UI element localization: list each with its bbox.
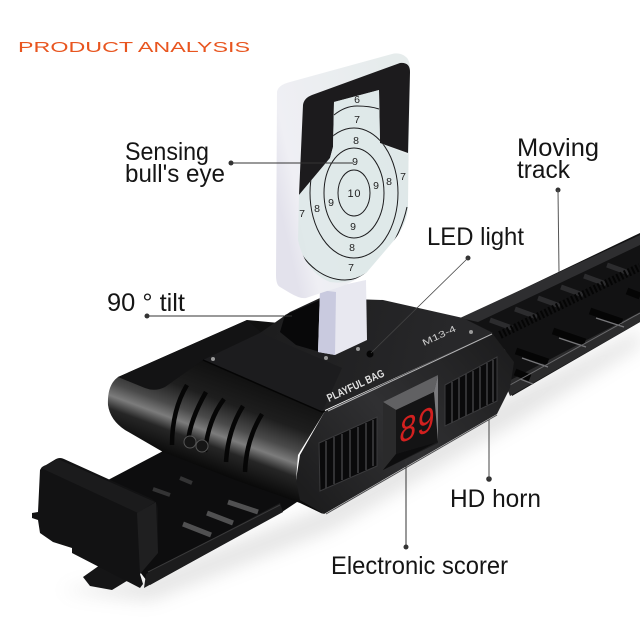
label: electronic scorer	[331, 460, 508, 580]
target numbers: 9	[328, 197, 334, 209]
label: electronic scorer: Electronic scorer	[331, 552, 508, 580]
score digits: 89	[397, 399, 437, 456]
label: sensing bull's eye: bull's eye	[125, 160, 225, 188]
ground shadow	[60, 330, 640, 600]
label: sensing bull's eye	[125, 138, 353, 188]
LED hole	[366, 350, 374, 358]
label: moving track: track	[517, 156, 570, 184]
target numbers: 9	[373, 180, 379, 192]
electronic display	[383, 375, 438, 470]
lower row slots	[515, 291, 640, 378]
rear dip	[118, 320, 262, 390]
rail slots	[183, 502, 258, 535]
moving track	[458, 233, 640, 396]
target numbers: 8	[353, 135, 359, 147]
label: 90 degree tilt: 90 ° tilt	[107, 289, 185, 317]
outer rail band	[460, 235, 640, 322]
label: moving track	[517, 134, 599, 272]
scorer body	[108, 298, 514, 514]
target numbers: 9	[352, 156, 358, 168]
target numbers: 7	[299, 208, 305, 220]
target numbers: 9	[350, 221, 356, 233]
target stem	[318, 280, 367, 355]
label: moving track: Moving	[517, 134, 599, 162]
cylinder body	[108, 320, 325, 514]
ribs	[172, 385, 262, 472]
target numbers: 7	[348, 262, 354, 274]
right speaker grille	[445, 357, 497, 426]
target plate	[276, 53, 410, 298]
screws	[211, 330, 473, 361]
target numbers: 6	[354, 94, 360, 106]
top plate	[203, 298, 493, 412]
front face	[296, 333, 514, 514]
label: LED light: LED light	[427, 223, 524, 251]
target numbers: 8	[349, 242, 355, 254]
target numbers: 7	[354, 114, 360, 126]
front rail	[32, 450, 300, 590]
end plate	[32, 458, 158, 588]
target rings	[295, 106, 407, 280]
target numbers: 7	[400, 171, 406, 183]
label: sensing bull's eye: Sensing	[125, 138, 209, 166]
left speaker grille	[319, 417, 377, 491]
hex screws	[184, 436, 208, 452]
target numbers: 8	[314, 203, 320, 215]
brand text: PLAYFUL BAG	[325, 368, 386, 405]
label: 90 degree tilt	[107, 289, 292, 318]
upper row slots	[490, 265, 629, 328]
model text: M13-4	[421, 324, 457, 348]
label: HD horn	[450, 420, 541, 513]
label: LED light	[371, 223, 524, 353]
label: HD horn: HD horn	[450, 485, 541, 513]
title: PRODUCT ANALYSIS	[18, 39, 250, 56]
target numbers	[299, 94, 406, 274]
target numbers: 10	[348, 188, 360, 200]
rail tab	[83, 565, 130, 590]
target numbers: 8	[386, 176, 392, 188]
rack teeth	[500, 267, 640, 335]
